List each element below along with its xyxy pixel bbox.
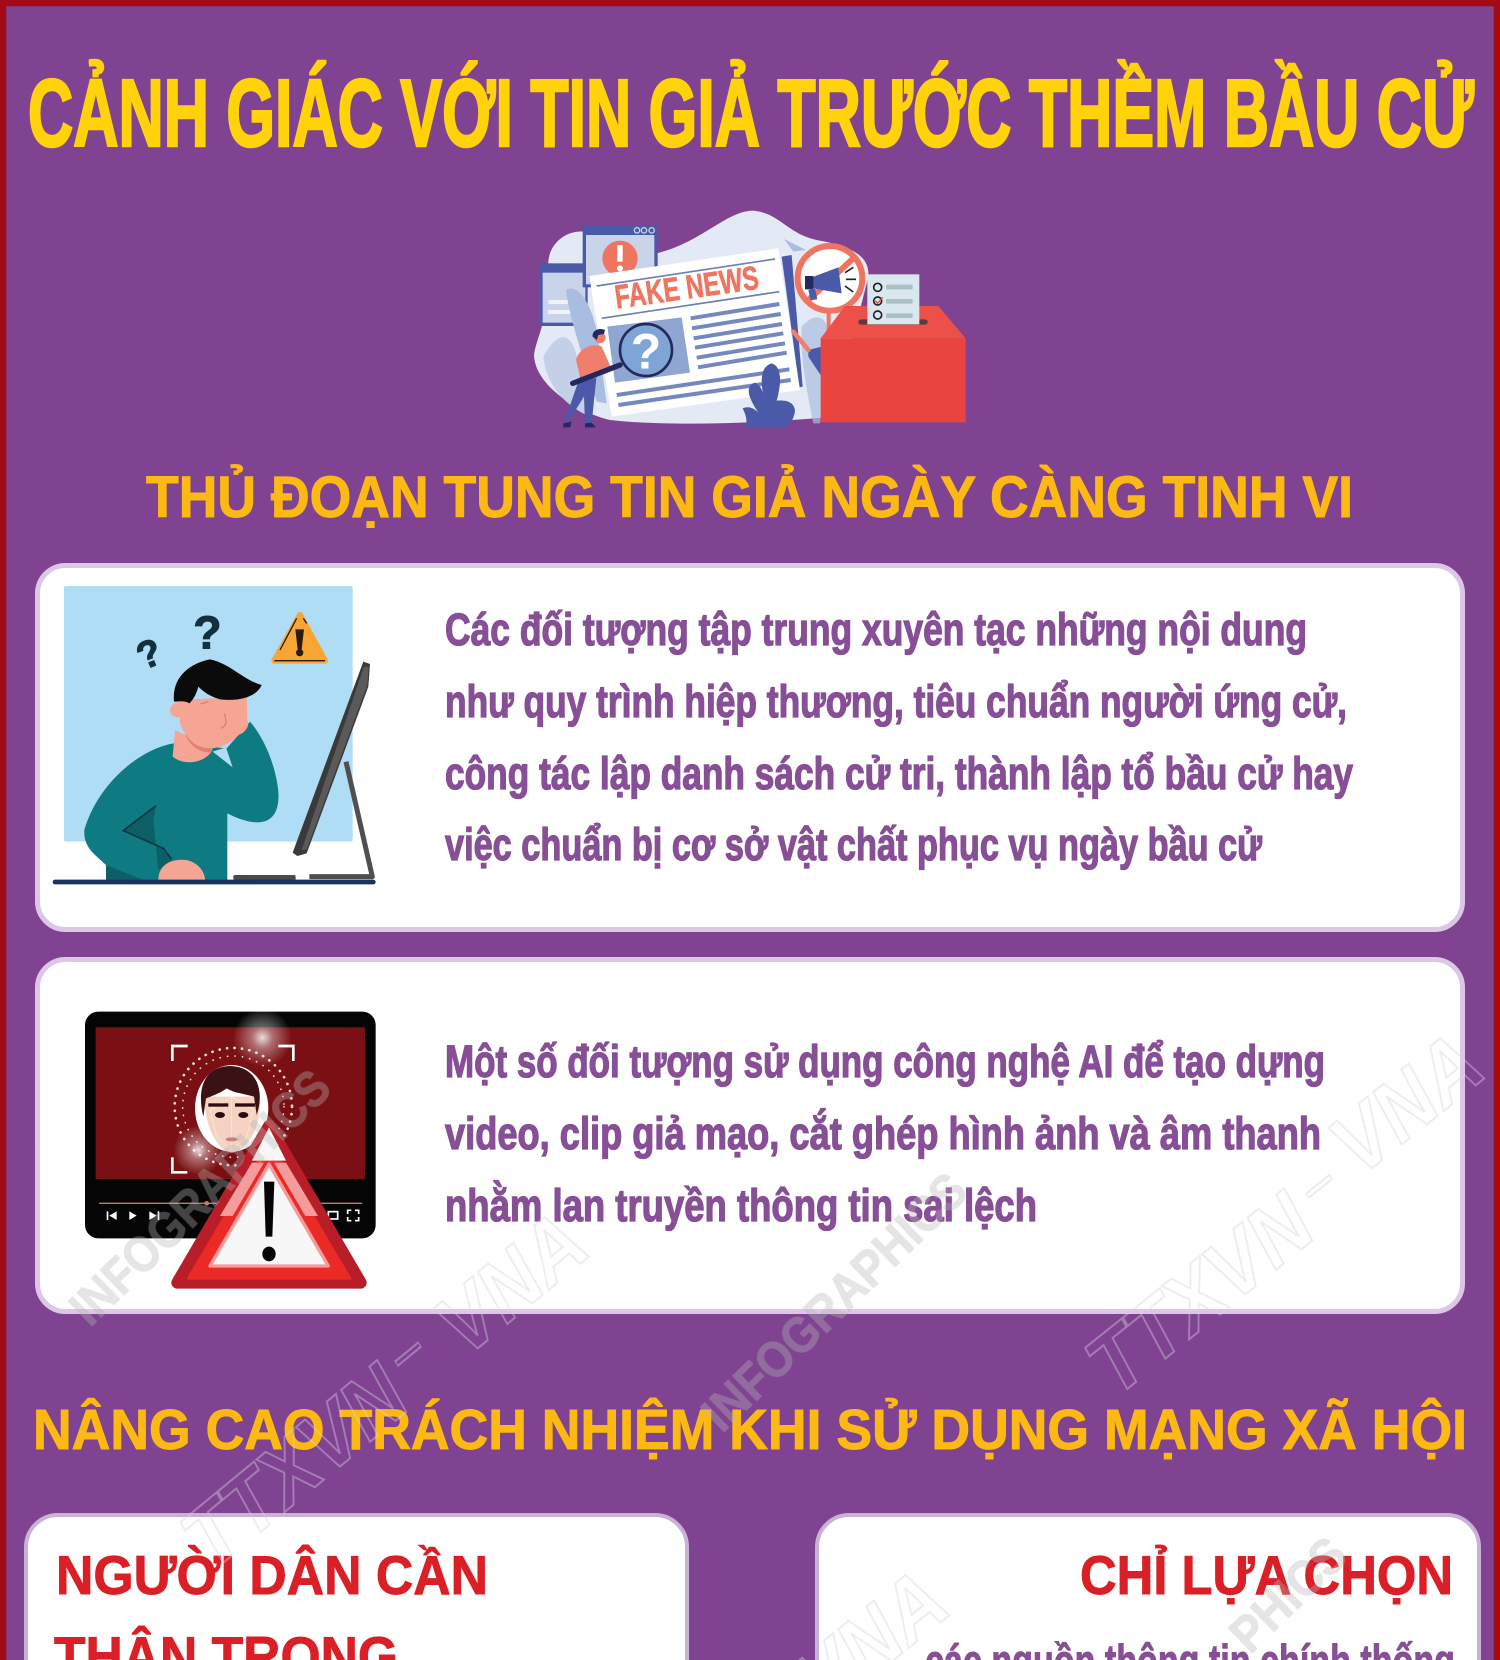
text block: card 2 [445,1036,1325,1231]
panel: chỉ lựa chọn [817,1515,1479,1660]
illustration: confused man at computer [55,586,373,882]
watermark: agency marks: — [376,1320,436,1383]
illustration: confused man at computer: ? [193,606,222,658]
watermark: agency marks [59,1016,1500,1660]
illustration: fake news newspaper and ballot box: FAKE NEWS [613,260,761,317]
panel: card 2 [38,960,1462,1312]
text block: card 2: nhằm lan truyền thông tin sai lệch [445,1180,1037,1231]
panel: người dân cần thận trọng: NGƯỜI DÂN CẦN [56,1544,488,1606]
illustration: fake news newspaper and ballot box [534,211,966,427]
text block: card 1: việc chuẩn bị cơ sở vật chất phục vụ ngày bầu cử [445,819,1262,870]
illustration: confused man at computer: ? [130,630,168,679]
watermark: agency marks: PHICS [1219,1526,1358,1660]
panel: card 1 [38,566,1462,930]
panel: người dân cần thận trọng [26,1515,687,1660]
watermark: agency marks: INFOGRAPHICS [59,1059,341,1336]
watermark: agency marks: — [1287,1152,1347,1215]
watermark: agency marks: TTXVN [164,1346,427,1587]
heading: thủ đoạn tung tin giả: THỦ ĐOẠN TUNG TIN GIẢ NGÀY CÀNG TINH VI [146,465,1353,530]
panel: chỉ lựa chọn: CHỈ LỰA CHỌN [1080,1544,1453,1606]
watermark: agency marks: INFOGRAPHICS [691,1162,978,1442]
watermark: agency marks: TTXVN [1068,1175,1333,1413]
text block: card 1 [445,604,1353,870]
watermark: agency marks: VNA [418,1194,605,1373]
illustration: fake news newspaper and ballot box: ? [631,323,661,379]
illustration: deepfake video with warning sign [85,1008,376,1283]
